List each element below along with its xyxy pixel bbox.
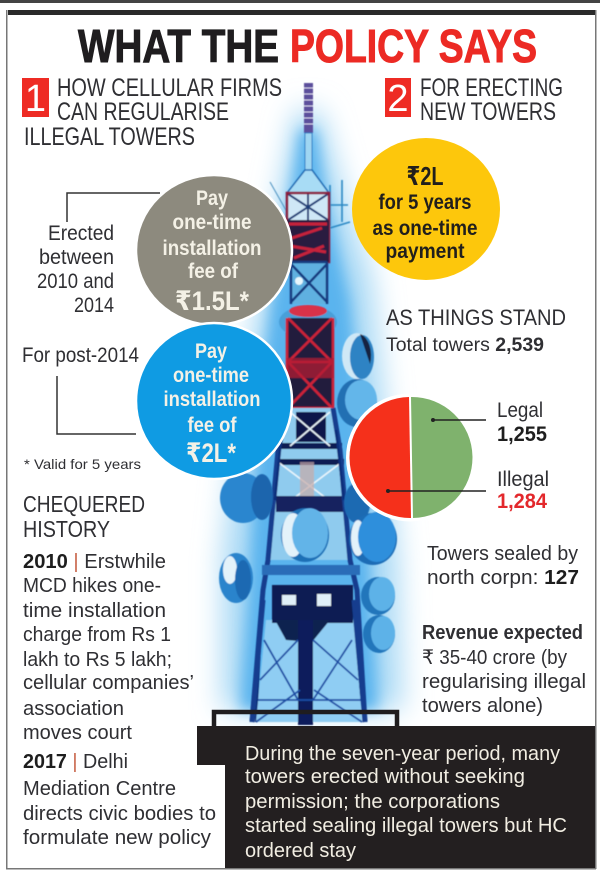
dish second right — [337, 379, 377, 427]
mid lattice — [270, 408, 350, 560]
lattice below red — [291, 262, 327, 304]
history heading: CHEQUERED — [23, 491, 145, 517]
dish center — [281, 508, 329, 562]
2017 entry: directs civic bodies to — [23, 803, 216, 825]
pie chart — [346, 394, 486, 522]
2010 entry: association — [23, 698, 124, 720]
mast — [304, 83, 313, 133]
dish mid right back — [344, 483, 370, 523]
legend: illegal: Illegal — [497, 468, 549, 491]
circle: blue fee: installation — [164, 388, 260, 411]
dish lower left — [219, 553, 253, 603]
2010 entry: charge from Rs 1 — [23, 624, 171, 646]
2017 entry: 2017 | Delhi — [23, 751, 128, 773]
tower illustration — [219, 83, 402, 725]
footnote: * Valid for 5 years — [24, 456, 141, 472]
circle: blue fee: one-time — [173, 364, 249, 387]
circle: grey fee: fee of — [188, 260, 239, 283]
circle: grey fee: ₹1.5L* — [175, 286, 249, 316]
circle: grey fee: installation — [162, 237, 262, 260]
title: POLICY SAYS — [290, 20, 537, 72]
dishes — [219, 333, 397, 653]
2010 entry: moves court — [23, 722, 132, 744]
2010 entry: cellular companies’ — [23, 672, 194, 694]
history heading: HISTORY — [23, 516, 110, 542]
section 2 heading — [385, 74, 563, 126]
revenue expected: towers alone) — [422, 695, 543, 717]
section 1 heading: HOW CELLULAR FIRMS — [57, 74, 282, 102]
towers sealed: Towers sealed by — [427, 542, 579, 565]
dish big left — [220, 473, 273, 523]
base frame of tower — [214, 712, 397, 727]
as things stand heading: Total towers 2,539 — [386, 335, 544, 356]
revenue expected: regularising illegal — [422, 671, 586, 693]
circle: blue fee: fee of — [188, 414, 237, 437]
dish upper right — [342, 333, 374, 379]
section 1 heading: CAN REGULARISE — [57, 98, 229, 126]
lower red block — [288, 318, 332, 408]
dish lower right 1 — [361, 577, 395, 615]
black callout: started sealing illegal towers but HC — [245, 814, 567, 837]
legend: illegal: 1,284 — [497, 490, 547, 513]
circle: grey fee: one-time — [172, 211, 252, 234]
towers sealed: north corpn: 127 — [427, 566, 579, 589]
red section — [287, 193, 329, 220]
dish lower right 2 — [363, 615, 395, 653]
circle: yellow new tower fee — [352, 138, 500, 280]
base interior — [256, 620, 362, 722]
circle: yellow new tower fee: payment — [386, 240, 465, 263]
circle: blue fee: Pay — [195, 340, 227, 363]
revenue expected: ₹ 35-40 crore (by — [422, 647, 567, 669]
label: erected between: Erected — [48, 222, 114, 245]
2017 entry — [23, 751, 216, 849]
number badge 1: 1 — [25, 78, 46, 120]
2010 entry — [23, 551, 194, 744]
label: erected between — [37, 222, 114, 317]
title — [78, 20, 537, 72]
circle: blue fee — [136, 323, 292, 479]
2010 entry: time installation — [23, 600, 166, 622]
history heading — [23, 491, 145, 542]
legend: legal — [497, 399, 547, 446]
label: erected between: 2014 — [74, 294, 114, 317]
section 1 heading — [22, 74, 282, 151]
label: post-2014: For post-2014 — [22, 344, 139, 367]
towers sealed — [427, 542, 579, 589]
section 2 heading: NEW TOWERS — [420, 98, 556, 126]
title: WHAT THE — [78, 20, 279, 72]
rear dish — [279, 306, 337, 338]
connector: post-2014 — [57, 376, 136, 434]
2010 entry: 2010 | Erstwhile — [23, 551, 166, 573]
connector: erected — [67, 193, 160, 222]
label: erected between: 2010 and — [37, 270, 114, 293]
tower mast and lattice — [252, 83, 365, 725]
revenue expected: Revenue expected — [422, 622, 583, 644]
2010 entry: lakh to Rs 5 lakh; — [23, 649, 172, 671]
section 1 heading: ILLEGAL TOWERS — [24, 123, 195, 151]
legs — [252, 408, 365, 722]
blue glow behind tower — [222, 110, 402, 710]
circle: yellow new tower fee: ₹2L — [406, 161, 444, 191]
as things stand heading — [386, 305, 566, 356]
black callout: permission; the corporations — [245, 790, 500, 813]
2017 entry: Mediation Centre — [23, 778, 176, 800]
circle: grey fee: Pay — [196, 187, 228, 210]
chequered history — [23, 491, 216, 849]
label: erected between: between — [39, 246, 114, 269]
legend: legal: Legal — [497, 399, 543, 422]
black callout: towers erected without seeking — [245, 765, 525, 788]
circle: blue fee: ₹2L* — [186, 438, 236, 468]
legend: legal: 1,255 — [497, 423, 547, 446]
2010 entry: MCD hikes one- — [23, 575, 161, 597]
legend: illegal — [497, 468, 549, 513]
circle: yellow new tower fee: for 5 years — [378, 191, 472, 214]
black callout: During the seven-year period, many — [245, 742, 561, 765]
black callout — [197, 726, 595, 868]
as things stand heading: AS THINGS STAND — [386, 305, 566, 330]
2017 entry: formulate new policy — [23, 827, 211, 849]
number badge 2: 2 — [387, 78, 409, 120]
dish right — [349, 512, 397, 565]
revenue expected — [422, 622, 586, 717]
black callout: ordered stay — [245, 839, 357, 862]
circle: grey fee — [136, 175, 292, 325]
circle: yellow new tower fee: as one-time — [372, 217, 478, 240]
